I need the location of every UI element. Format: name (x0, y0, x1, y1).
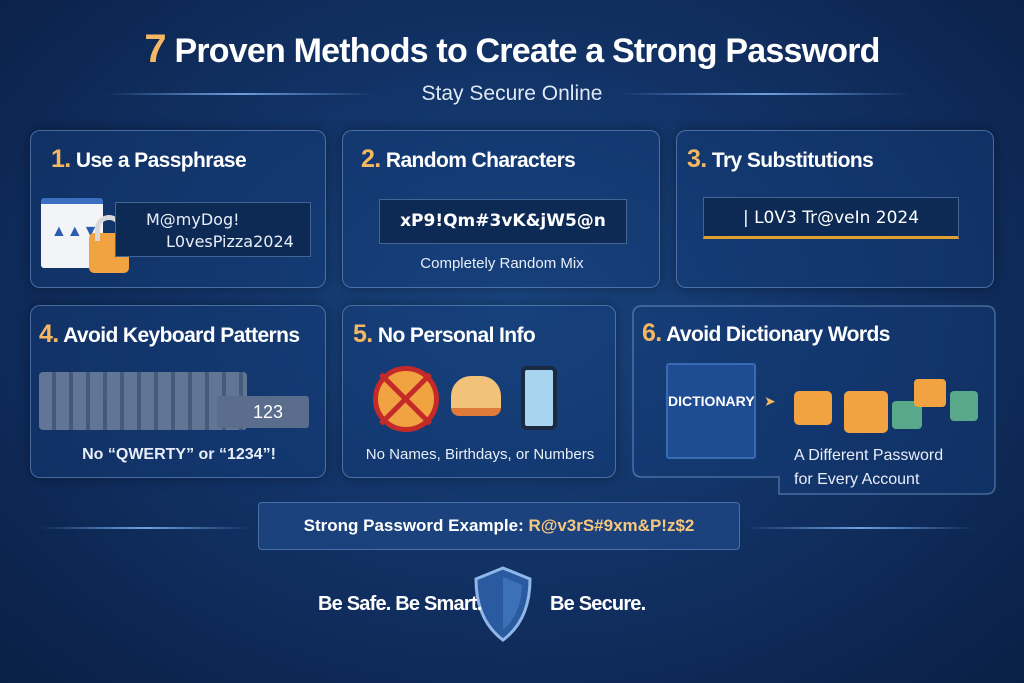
icon: locks: ➤ (764, 393, 776, 409)
icon: locks (764, 379, 978, 433)
heading 2: 2. Random Characters (361, 145, 575, 173)
heading 5: 5. No Personal Info (353, 320, 535, 348)
strong password example bar (258, 502, 740, 550)
password box (115, 202, 311, 257)
icon: notepad with lock: ▲▲▼ (51, 223, 99, 240)
icon: dictionary book: DICTIONARY (668, 393, 755, 409)
password box: M@myDog! (146, 210, 240, 229)
caption: panel 6: A Different Password (794, 447, 943, 464)
password box: L0vesPizza2024 (166, 232, 294, 251)
panel: 6 dictionary (632, 305, 996, 495)
panel: 2 random (342, 130, 660, 288)
footer slogan: Be Secure. (550, 593, 645, 615)
icon: keyboard: 123 (253, 402, 283, 422)
panel: 5 personal info (342, 305, 616, 478)
heading 6: 6. Avoid Dictionary Words (642, 319, 890, 347)
subtitle: Stay Secure Online (422, 82, 602, 105)
icon: notepad with lock (41, 198, 129, 273)
footer slogan: Be Safe. Be Smart. (318, 593, 481, 615)
strong password example bar: Strong Password Example: R@v3rS#9xm&P!z$2 (304, 516, 694, 535)
icon: shield (474, 566, 532, 642)
caption: No “QWERTY” or “1234”! (82, 446, 276, 463)
password box (703, 197, 959, 239)
icons: no-name, cake, phone (373, 366, 557, 432)
heading 4: 4. Avoid Keyboard Patterns (39, 320, 299, 348)
panel: 4 keyboard (30, 305, 326, 478)
caption: No Names, Birthdays, or Numbers (366, 446, 594, 463)
password box (379, 199, 627, 244)
caption: Completely Random Mix (420, 255, 584, 272)
icon: keyboard (39, 372, 309, 430)
caption: panel 6: for Every Account (794, 471, 919, 488)
panel: 1 passphrase (30, 130, 326, 288)
footer slogan (318, 566, 645, 642)
caption: panel 6 (794, 447, 943, 488)
heading 1: 1. Use a Passphrase (51, 145, 246, 173)
panel: 3 substitutions (676, 130, 994, 288)
password box: xP9!Qm#3vK&jW5@n (400, 211, 606, 231)
icon: dictionary book (666, 363, 756, 459)
title: 7 Proven Methods to Create a Strong Password (144, 27, 880, 71)
heading 3: 3. Try Substitutions (687, 145, 873, 173)
password box: | L0V3 Tr@veIn 2024 (743, 208, 919, 228)
